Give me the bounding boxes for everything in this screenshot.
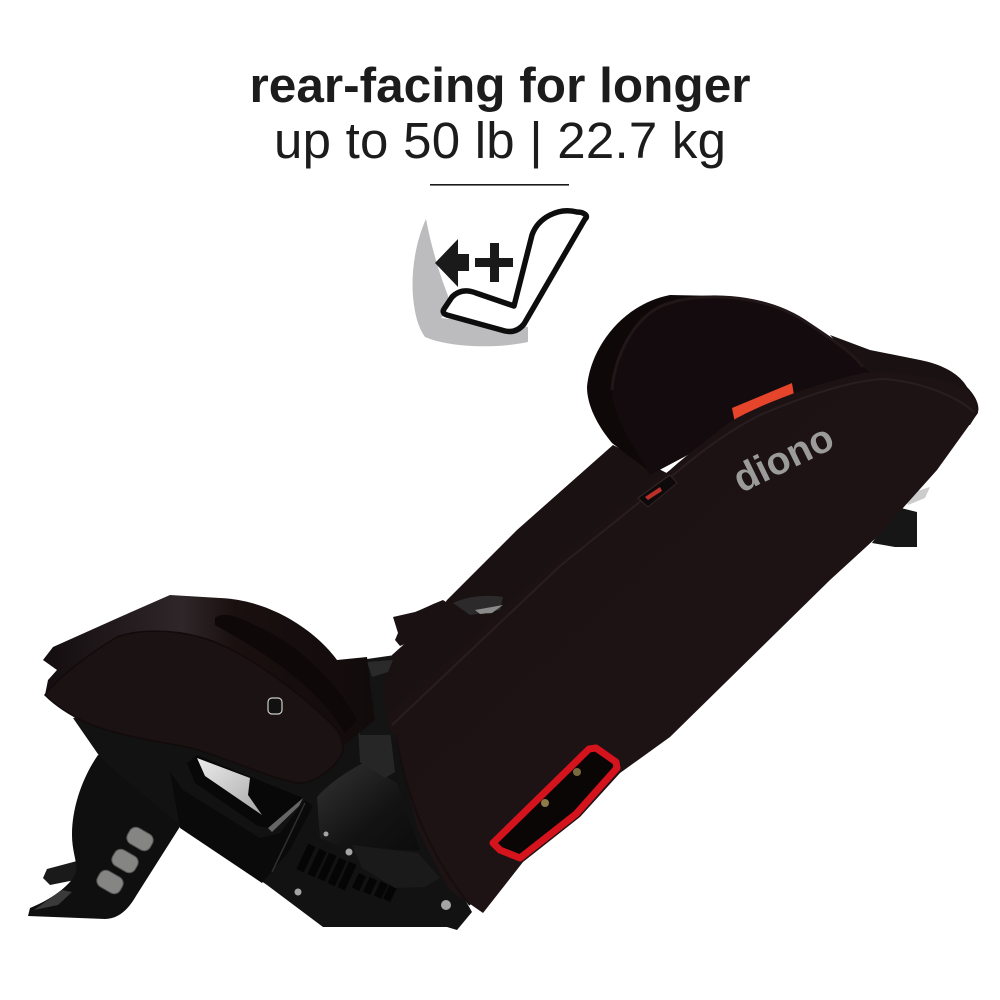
headrest: [587, 295, 880, 475]
car seat product illustration: [28, 295, 978, 930]
top rear pad: [830, 335, 978, 425]
fabric label: [638, 475, 677, 507]
buttons on leg: [94, 825, 156, 896]
red handle opening: [493, 748, 617, 858]
subtitle: up to 50 lb | 22.7 kg: [274, 112, 726, 169]
rear shell behind backrest: [395, 445, 680, 740]
title: rear-facing for longer: [250, 58, 750, 113]
vents: [296, 844, 397, 902]
plastic base: [73, 700, 472, 930]
seam: [392, 379, 974, 725]
logo: diono: [726, 416, 841, 501]
harness, buckle and inner cushion: [360, 580, 527, 735]
chrome lever: [187, 755, 303, 832]
icon: seat badge: [268, 698, 282, 714]
seat side panel: [45, 631, 343, 783]
icon: seat with extended rear-facing space: [412, 211, 586, 346]
screws: [294, 832, 451, 910]
small clip at rear: [872, 487, 930, 547]
red tag: diono: [756, 401, 775, 414]
red tag: [732, 383, 794, 423]
leg and belt-path foot: [28, 755, 181, 919]
backrest side panel: [387, 372, 978, 913]
seat cushion top: [43, 595, 375, 745]
